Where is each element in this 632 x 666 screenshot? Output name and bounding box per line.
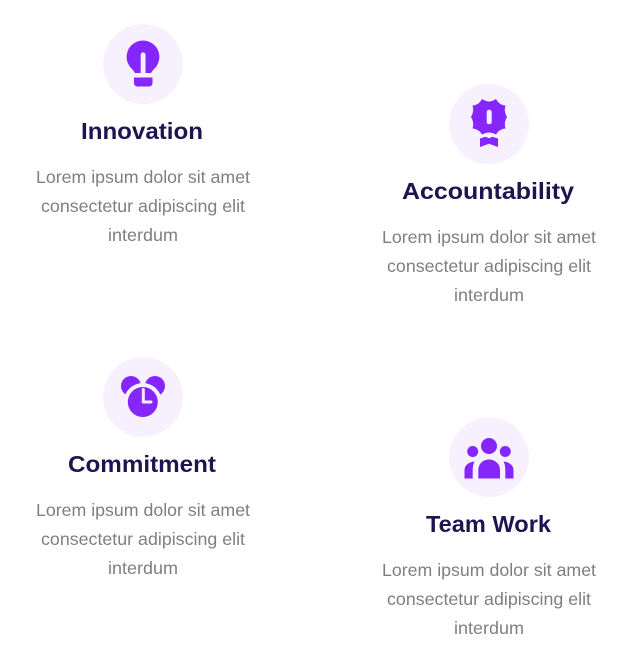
text block: innovation: Lorem ipsum dolor sit amet (36, 167, 250, 187)
text block: innovation (36, 167, 250, 245)
heading: accountability: Accountability (402, 178, 574, 204)
text block: commitment: Lorem ipsum dolor sit amet (36, 500, 250, 520)
text block: accountability: interdum (454, 285, 524, 305)
text block: accountability (382, 227, 596, 305)
text block: commitment: consectetur adipiscing elit (41, 529, 245, 549)
icon: light bulb (103, 24, 183, 104)
text block: accountability: consectetur adipiscing elit (387, 256, 591, 276)
text block: innovation: interdum (108, 225, 178, 245)
panel: innovation (36, 24, 250, 245)
icon: alarm clock (103, 357, 183, 437)
heading: commitment: Commitment (68, 451, 216, 477)
text block: team work: consectetur adipiscing elit (387, 589, 591, 609)
text block: commitment: interdum (108, 558, 178, 578)
panel: commitment (36, 357, 250, 578)
panel: accountability (382, 84, 596, 305)
text block: commitment (36, 500, 250, 578)
icon: award badge (449, 84, 529, 164)
panel: team work (382, 417, 596, 638)
text block: accountability: Lorem ipsum dolor sit amet (382, 227, 596, 247)
icon: team of people (449, 417, 529, 497)
heading: team work: Team Work (426, 511, 551, 537)
text block: team work (382, 560, 596, 638)
text block: innovation: consectetur adipiscing elit (41, 196, 245, 216)
heading: innovation: Innovation (81, 118, 203, 144)
text block: team work: interdum (454, 618, 524, 638)
text block: team work: Lorem ipsum dolor sit amet (382, 560, 596, 580)
